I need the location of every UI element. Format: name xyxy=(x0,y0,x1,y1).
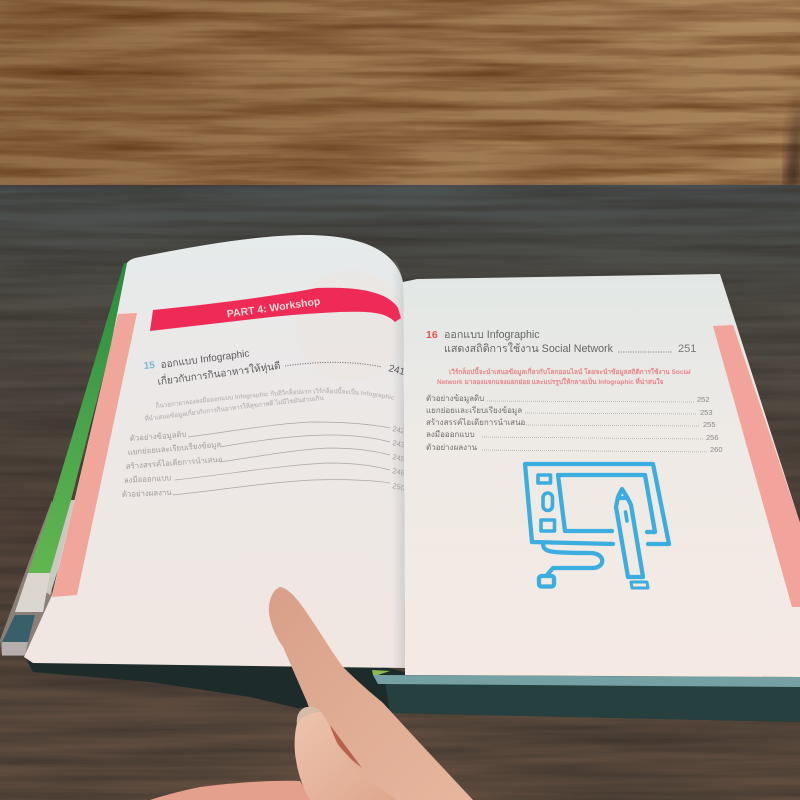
chapter 15 heading: 15 xyxy=(143,360,156,372)
chapter 16 intro text: เวิร์กล็อปนี้จะนำเสนอข้อมูลเกี่ยวกับโลกออนไลน์ โดยจะนำข้อมูลสถิติการใช้งาน Social xyxy=(449,366,691,377)
chapter 16 table of contents: 252 xyxy=(697,395,710,404)
chapter 15 heading: 241 xyxy=(387,363,407,378)
gap shadow between fingers xyxy=(330,725,362,768)
chapter 15 table of contents: สร้างสรรค์ไอเดียการนำเสนอ xyxy=(125,455,223,471)
chapter 16 heading xyxy=(426,329,696,355)
chapter 15 table of contents: 246 xyxy=(392,466,406,478)
middle finger xyxy=(295,707,397,800)
chapter 16 heading: ออกแบบ Infographic xyxy=(444,329,540,341)
left book cover edges xyxy=(0,263,127,657)
chapter 15 intro text: ก็นวยกายาลองลงมือออกแบบ Infographic กับอิวิกล็อปแรก เวิร์กล็อปนี้จะเป็น Infographic xyxy=(156,386,394,408)
chapter 16 table of contents xyxy=(426,394,723,454)
chapter 15 heading: ออกแบบ Infographic xyxy=(160,348,250,371)
book shadow on table xyxy=(24,655,800,722)
banner: PART 4 Workshop xyxy=(150,288,401,331)
chapter 16 table of contents: แยกย่อยและเรียบเรียงข้อมูล xyxy=(426,406,522,416)
chapter 15 table of contents: ลงมือออกแบบ xyxy=(124,473,172,485)
right page xyxy=(403,274,800,677)
fingernail xyxy=(297,707,321,724)
thumb xyxy=(150,781,312,800)
chapter 15 intro text xyxy=(144,386,394,421)
left page xyxy=(24,235,407,668)
chapter 16 heading: 251 xyxy=(678,343,696,355)
chapter 15 heading: เกี่ยวกับการกินอาหารให้หุ่นดี xyxy=(157,358,281,388)
chapter 16 table of contents: ตัวอย่างข้อมูลดิบ xyxy=(426,394,484,404)
chapter 15 heading xyxy=(143,348,407,388)
chapter 15 table of contents xyxy=(122,422,406,499)
chapter 16 heading: 16 xyxy=(426,329,438,341)
chapter 15 table of contents: ตัวอย่างข้อมูลดิบ xyxy=(129,430,187,444)
decorative pink band, right page xyxy=(713,325,800,607)
chapter 16 table of contents: 256 xyxy=(706,433,719,442)
decorative pink band, left page xyxy=(52,313,137,597)
chapter 16 table of contents: สร้างสรรค์ไอเดียการนำเสนอ xyxy=(426,417,526,427)
table surface xyxy=(0,185,800,800)
icon: drawing tablet and stylus xyxy=(525,464,669,588)
chapter 15 table of contents: 245 xyxy=(392,452,406,464)
chapter 15 table of contents: 243 xyxy=(392,438,406,450)
chapter 16 intro text: Network มาลองแจกแจงแยกย่อย และแปรรูปให้กลายเป็น Infographic ที่น่าสนใจ xyxy=(437,376,663,387)
chapter 16 table of contents: ตัวอย่างผลงาน xyxy=(426,443,478,452)
banner: PART 4 Workshop: PART 4: Workshop xyxy=(226,296,321,321)
back cover edge xyxy=(373,675,800,687)
chapter 16 heading: แสดงสถิติการใช้งาน Social Network xyxy=(444,342,614,355)
chapter 15 intro text: ที่นำเสนอข้อมูลเกี่ยวกับการกินอาหารให้สุขภาพดี ไม่มีไขมันส่วนเกิน xyxy=(144,395,324,421)
chapter 15 table of contents: แยกย่อยและเรียบเรียงข้อมูล xyxy=(127,440,222,458)
chapter 16 table of contents: 253 xyxy=(700,408,713,417)
chapter 16 table of contents: 260 xyxy=(710,445,723,454)
chapter 16 intro text xyxy=(437,366,691,387)
chapter 16 table of contents: 255 xyxy=(703,420,716,429)
hand: fingers xyxy=(150,587,473,800)
chapter 16 table of contents: ลงมือออกแบบ xyxy=(426,430,475,439)
chapter 15 table of contents: 242 xyxy=(392,424,406,436)
index finger xyxy=(269,587,473,800)
chapter 15 table of contents: 250 xyxy=(392,481,406,493)
wood wall background xyxy=(0,0,800,186)
chapter 15 table of contents: ตัวอย่างผลงาน xyxy=(122,488,172,499)
